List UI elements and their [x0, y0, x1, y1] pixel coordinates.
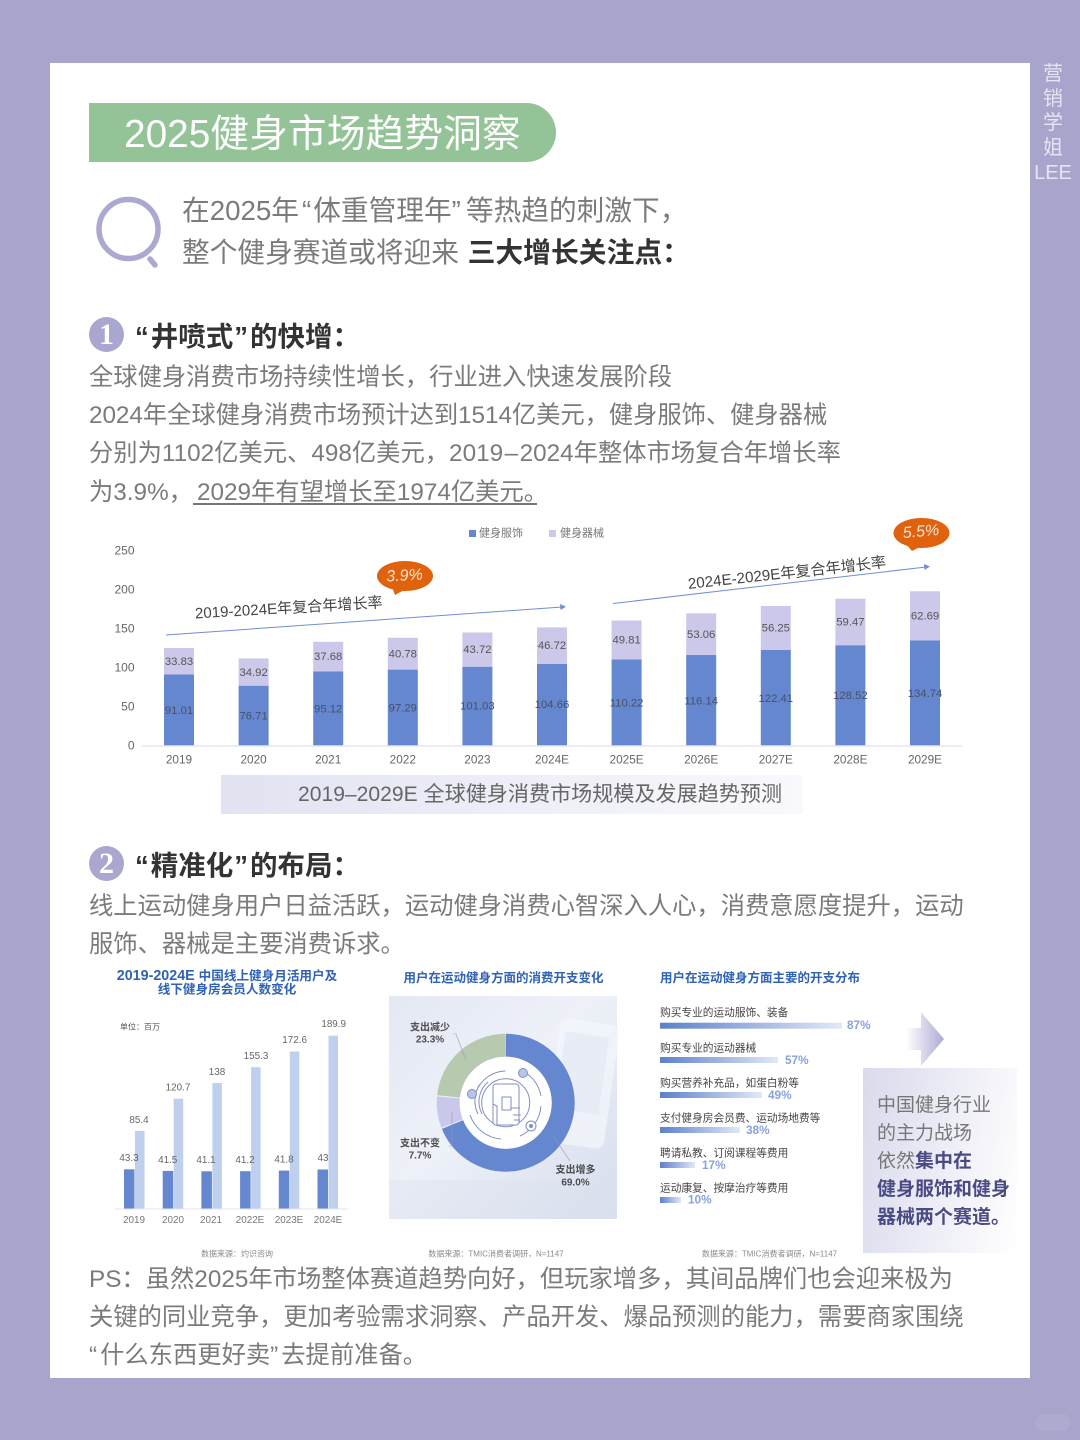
apparel values: 122.41	[759, 693, 793, 705]
bar labels: 聘请私教、订阅课程等费用	[660, 1146, 788, 1160]
apparel values: 116.14	[684, 695, 718, 707]
bar values: 43	[318, 1153, 329, 1164]
section 2 body text	[89, 893, 964, 958]
side watermark: author name: 销	[1043, 88, 1063, 110]
apparel values: 91.01	[165, 705, 193, 717]
chart title: 用户在运动健身方面的消费开支变化	[403, 970, 604, 985]
x axis labels: 2020	[240, 752, 267, 766]
side watermark: author name: 营	[1043, 63, 1063, 85]
section 1 body text: 为3.9%，2029年有望增长至1974亿美元。	[89, 479, 548, 506]
x axis labels: 2019	[123, 1215, 145, 1226]
x axis labels: 2024E	[314, 1215, 343, 1226]
equipment values: 62.69	[911, 610, 939, 622]
intro text: 在2025年“体重管理年”等热趋的刺激下，	[182, 195, 687, 226]
bar values: 41.2	[235, 1155, 255, 1166]
equipment values: 56.25	[762, 622, 790, 634]
source: 数据来源：灼识咨询	[201, 1248, 273, 1258]
donut labels: 支出减少	[410, 1020, 450, 1034]
x axis labels: 2023	[464, 752, 491, 766]
corner watermark	[1035, 1414, 1071, 1431]
section 1 body text: 2024年全球健身消费市场预计达到1514亿美元，健身服饰、健身器械	[89, 402, 827, 429]
x axis labels	[166, 752, 942, 766]
title banner: 2025健身市场趋势洞察	[124, 113, 521, 156]
x axis labels: 2021	[315, 752, 341, 766]
unit note: 单位：百万	[120, 1022, 160, 1032]
bar values: 189.9	[321, 1019, 347, 1030]
percent values: 87%	[847, 1018, 871, 1032]
bar values	[119, 1019, 347, 1166]
bar values: 85.4	[129, 1115, 149, 1126]
bar values: 120.7	[166, 1082, 190, 1094]
bar values: 172.6	[282, 1035, 307, 1046]
callout bubble 3.9%	[377, 561, 433, 595]
section 1 number badge: 1	[99, 318, 114, 351]
intro text: 整个健身赛道或将迎来 三大增长关注点：	[182, 237, 690, 268]
arrow: CAGR 2024E-2029E: 2024E-2029E年复合年增长率	[687, 554, 887, 593]
donut labels	[400, 1020, 596, 1188]
y axis labels: 100	[114, 660, 135, 674]
percent values	[688, 1018, 871, 1206]
arrow: CAGR 2019-2024E	[166, 593, 566, 635]
percent values: 38%	[746, 1123, 770, 1137]
grouped bar chart: China users	[115, 968, 348, 1258]
callout bubble 3.9%: 3.9%	[386, 567, 423, 585]
percent values: 57%	[785, 1053, 809, 1067]
x axis labels: 2026E	[684, 752, 718, 766]
y axis labels: 150	[114, 622, 135, 636]
equipment values: 43.72	[463, 644, 492, 656]
section 1 heading: “井喷式”的快增：	[135, 321, 360, 352]
equipment values: 37.68	[314, 651, 342, 663]
x axis labels: 2029E	[908, 752, 942, 766]
leader lines	[449, 1034, 570, 1161]
section 1 number badge	[89, 317, 124, 352]
bar labels	[660, 1006, 821, 1194]
chart title: 2019-2024E 中国线上健身月活用户及	[117, 968, 338, 984]
horizontal bar chart: spending distribution	[660, 970, 871, 1258]
PS paragraph: PS：虽然2025年市场整体赛道趋势向好，但玩家增多，其间品牌们也会迎来极为	[89, 1266, 953, 1293]
donut chart: spending change	[389, 970, 617, 1258]
bar labels: 购买专业的运动服饰、装备	[660, 1006, 789, 1019]
equipment values: 49.81	[612, 634, 641, 646]
gym member bars	[124, 1169, 328, 1209]
equipment values	[165, 610, 939, 679]
bar values: 138	[209, 1067, 226, 1078]
bar labels: 支付健身房会员费、运动场地费等	[660, 1112, 821, 1124]
apparel values: 104.66	[535, 699, 569, 711]
section 1 body text: 全球健身消费市场持续性增长，行业进入快速发展阶段	[89, 364, 672, 391]
x axis labels: 2022E	[236, 1215, 265, 1226]
donut labels: 支出增多	[556, 1163, 596, 1176]
callout: conclusion: 器械两个赛道。	[877, 1207, 1010, 1228]
apparel bars	[164, 640, 940, 746]
bar values: 155.3	[244, 1051, 269, 1062]
equipment bars	[164, 591, 940, 686]
bar values: 41.1	[196, 1155, 216, 1166]
chart title: 用户在运动健身方面主要的开支分布	[660, 970, 860, 985]
section 2 number badge	[89, 846, 124, 881]
chart title	[117, 968, 338, 996]
bar values: 43.3	[119, 1153, 139, 1164]
equipment values: 46.72	[538, 640, 566, 652]
equipment values: 59.47	[836, 616, 865, 628]
chart caption: 2019–2029E 全球健身消费市场规模及发展趋势预测	[298, 783, 782, 806]
y axis labels: 0	[128, 738, 135, 752]
PS paragraph	[89, 1266, 964, 1369]
side watermark: author name: LEE	[1034, 162, 1072, 184]
section 2 heading: “精准化”的布局：	[135, 850, 360, 881]
bar labels: 运动康复、按摩治疗等费用	[660, 1182, 788, 1194]
equipment values: 40.78	[389, 648, 417, 660]
percent values: 17%	[702, 1158, 726, 1172]
y axis labels: 250	[114, 544, 135, 558]
bar labels: 购买专业的运动器械	[660, 1042, 757, 1054]
bars	[660, 1023, 842, 1203]
callout bubble 5.5%	[894, 518, 950, 551]
x axis labels: 2024E	[535, 752, 569, 766]
icon: magnifier	[96, 196, 161, 268]
section 2 body text: 线上运动健身用户日益活跃，运动健身消费心智深入人心，消费意愿度提升，运动	[89, 893, 964, 920]
chart title: 线下健身房会员人数变化	[158, 982, 297, 996]
apparel values: 97.29	[389, 702, 417, 714]
chart caption	[221, 775, 803, 814]
x axis labels: 2020	[162, 1215, 184, 1226]
PS paragraph: “什么东西更好卖”去提前准备。	[89, 1342, 427, 1369]
donut rings	[448, 1045, 563, 1160]
source: 数据来源：TMIC消费者调研，N=1147	[428, 1248, 564, 1258]
stacked bar chart: global fitness market	[114, 518, 962, 766]
donut labels: 支出不变	[400, 1136, 440, 1150]
callout: conclusion: 中国健身行业	[877, 1095, 991, 1116]
x axis labels: 2021	[200, 1215, 222, 1226]
equipment values: 34.92	[239, 667, 268, 679]
photo background with phone	[389, 996, 620, 1219]
section 2 body text: 服饰、器械是主要消费诉求。	[89, 931, 405, 958]
bar values: 41.5	[158, 1155, 178, 1166]
x axis labels	[123, 1215, 343, 1226]
source: 数据来源：TMIC消费者调研，N=1147	[702, 1248, 838, 1258]
bar labels: 购买营养补充品，如蛋白粉等	[660, 1076, 799, 1090]
online user bars	[135, 1036, 338, 1209]
equipment values: 53.06	[687, 629, 715, 641]
icon: phone in hand	[468, 1068, 541, 1139]
side watermark: author name: 姐	[1043, 137, 1063, 159]
callout: conclusion: 依然集中在	[877, 1151, 972, 1172]
apparel values: 101.03	[460, 700, 495, 712]
legend: 健身器械	[560, 526, 604, 540]
x axis labels: 2025E	[610, 752, 644, 766]
x axis labels: 2027E	[759, 752, 793, 766]
percent values: 49%	[768, 1088, 792, 1102]
apparel values	[165, 688, 942, 723]
equipment values: 33.83	[165, 656, 193, 668]
section 1 body text: 分别为1102亿美元、498亿美元，2019–2024年整体市场复合年增长率	[89, 440, 841, 467]
bar values: 41.8	[274, 1154, 294, 1166]
section 2 number badge: 2	[99, 847, 114, 880]
callout: conclusion	[863, 1068, 1017, 1253]
x axis labels: 2022	[390, 752, 416, 766]
x axis labels: 2028E	[833, 752, 868, 766]
donut labels: 7.7%	[409, 1150, 432, 1162]
callout: conclusion: 的主力战场	[877, 1123, 972, 1144]
apparel values: 76.71	[239, 711, 268, 723]
side watermark: author name	[1034, 63, 1072, 184]
y axis labels: 50	[121, 700, 135, 714]
callout: conclusion: 健身服饰和健身	[877, 1179, 1010, 1200]
legend	[469, 526, 604, 540]
axis line	[115, 1208, 348, 1210]
percent values: 10%	[688, 1192, 712, 1206]
y axis labels	[114, 544, 135, 752]
section 1 body text	[89, 364, 841, 506]
intro text	[182, 195, 690, 268]
axis line	[142, 745, 962, 747]
arrow: CAGR 2024E-2029E	[613, 554, 930, 604]
donut centre white disc	[460, 1057, 552, 1149]
apparel values: 134.74	[908, 688, 942, 700]
apparel values: 95.12	[314, 704, 342, 716]
donut labels: 69.0%	[561, 1178, 590, 1188]
arrow: CAGR 2019-2024E: 2019-2024E年复合年增长率	[194, 593, 383, 622]
y axis labels: 200	[114, 582, 135, 596]
apparel values: 110.22	[610, 698, 643, 710]
x axis labels: 2019	[166, 752, 192, 766]
x axis labels: 2023E	[275, 1215, 304, 1226]
side watermark: author name: 学	[1043, 112, 1063, 134]
callout bubble 5.5%: 5.5%	[902, 522, 940, 542]
PS paragraph: 关键的同业竞争，更加考验需求洞察、产品开发、爆品预测的能力，需要商家围绕	[89, 1304, 964, 1331]
legend: 健身服饰	[479, 526, 523, 540]
arrow: to conclusion	[910, 1012, 944, 1066]
apparel values: 128.52	[833, 690, 868, 702]
donut labels: 23.3%	[416, 1034, 444, 1046]
title banner	[89, 103, 556, 162]
